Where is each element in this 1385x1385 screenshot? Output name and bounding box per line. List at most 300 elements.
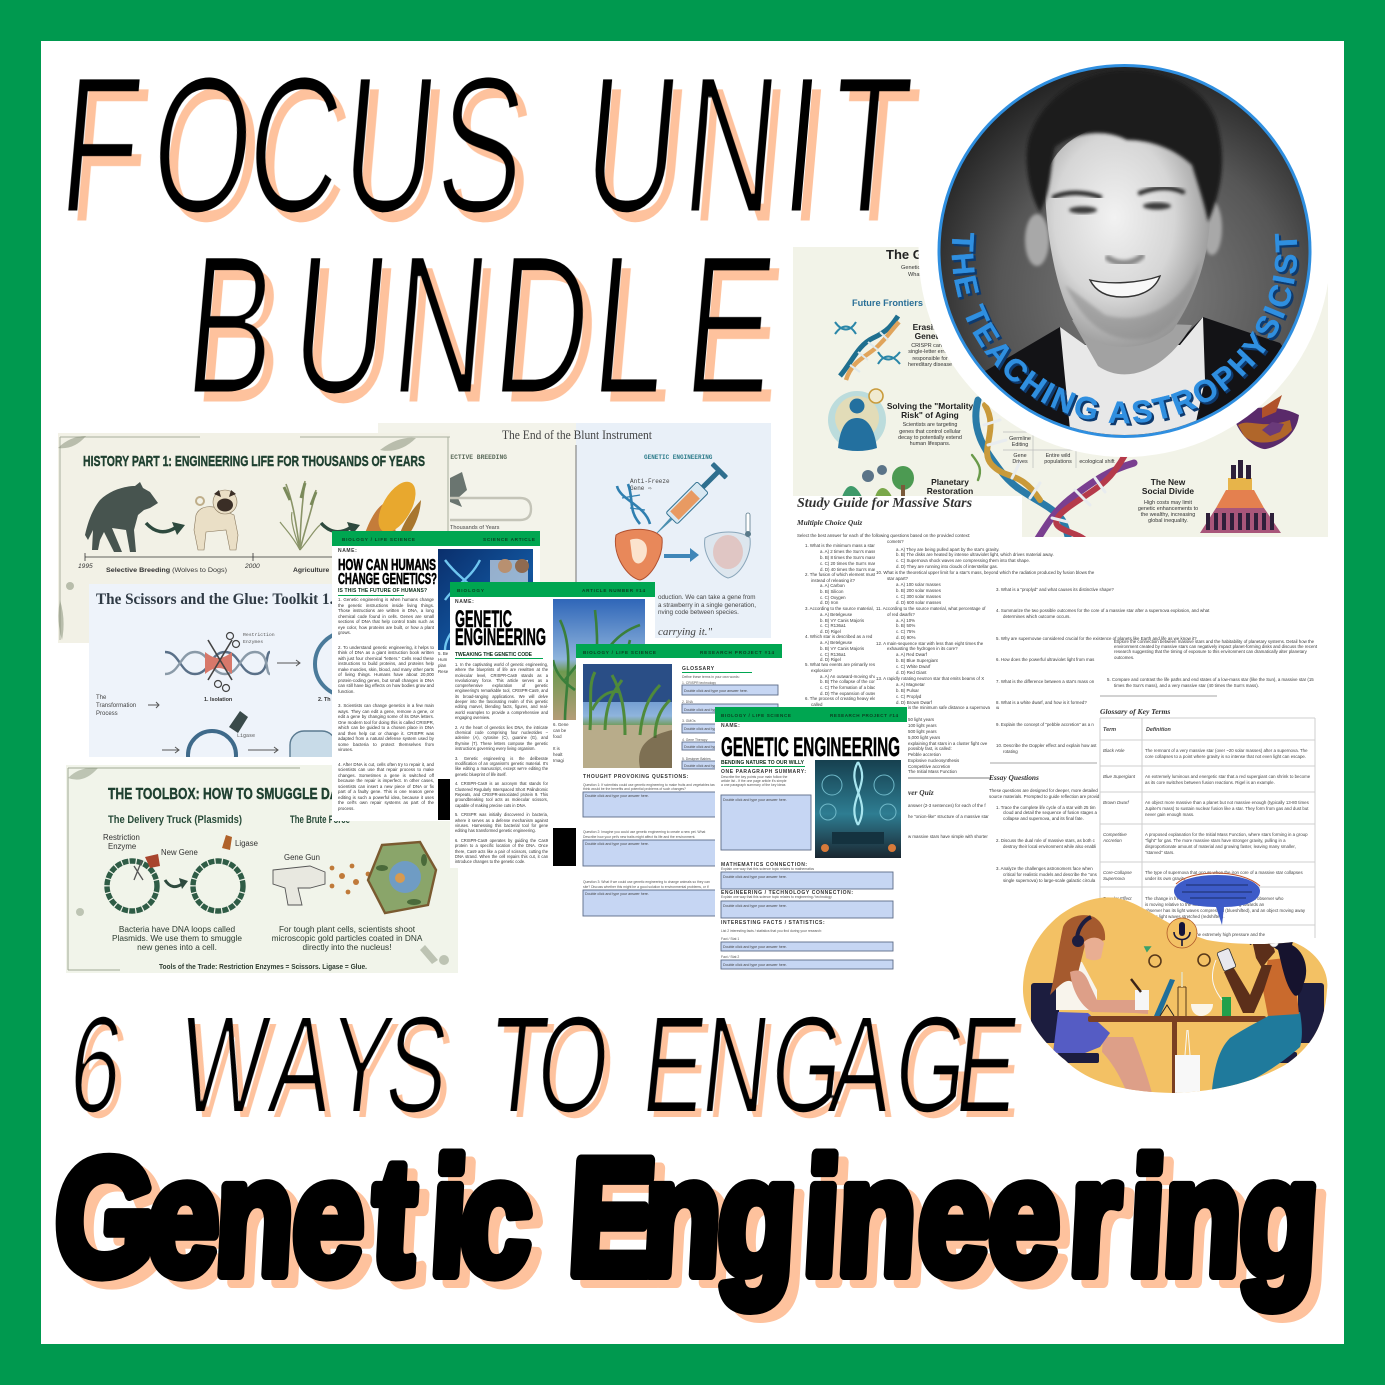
slide body text: nving code between species. — [658, 609, 739, 616]
text: planetary restoration — [927, 479, 973, 494]
header bar: RESEARCH PROJECT #14 — [830, 713, 898, 718]
connection sections: Fact / Stat 2 — [721, 955, 739, 959]
slide title: The End of the Blunt Instrument — [502, 428, 652, 442]
title: Genetic Engineering: Genetic Engineering — [50, 1126, 1323, 1310]
connection sections: MATHEMATICS CONNECTION: — [721, 862, 808, 868]
smile — [1090, 276, 1160, 297]
name field: NAME: — [338, 548, 357, 554]
article text: 2. At the heart of genetics lies DNA, the intricate chemical code comprising four nucleotides – adenine (A), cytosine (C), guanine (G), and thymine (T). These letters compose the genetic instructions governing every living organism. — [455, 725, 548, 751]
icon: planetary trees — [842, 465, 914, 497]
quiz column one — [805, 543, 879, 707]
article side text and box: 5. Be — [438, 651, 449, 656]
left woman legs — [1102, 1037, 1152, 1093]
summary block: a one paragraph summary of the key ideas — [721, 783, 786, 787]
header bar: BIOLOGY / LIFE SCIENCE — [342, 537, 415, 542]
quiz column two: b. B) The disks are heated by intense ultraviolet light, which drives material away. — [896, 552, 1054, 557]
short answers column: 9. Explain the concept of "pebble accretion" as a n — [996, 722, 1094, 727]
icon: microphone badge — [1167, 918, 1197, 948]
quiz column one: 6. The process of creating heavy ele — [805, 696, 876, 701]
arrow: isolation — [277, 660, 300, 666]
project subtitle: BENDING NATURE TO OUR WILLY — [721, 760, 805, 766]
quiz column two: star apart? — [887, 576, 909, 581]
face — [1045, 124, 1210, 347]
essay continuation: times the Sun's mass), and a very massive star (40 times the Sun's mass). — [1114, 683, 1259, 688]
header bar — [576, 644, 782, 658]
header bar — [715, 707, 907, 722]
title: 6 WAYS TO ENGAGE: 6 WAYS TO ENGAGE — [63, 987, 1026, 1141]
summary block: ONE PARAGRAPH SUMMARY: — [721, 769, 807, 775]
quiz column two: c. C) 300 solar masses — [896, 594, 942, 599]
process label: Transformation — [96, 703, 136, 709]
icon: frozen strawberry — [705, 532, 750, 578]
table: gene editing: Drives — [1012, 459, 1028, 465]
article text: 4. CRISPR-Cas9 is an acronym that stands for Clustered Regularly Interspaced Short Palindromic Repeats, and CRISPR-associated protein 9. This groundbreaking tool acts as molecular scissors, capable of making precise cuts in DNA. — [455, 781, 548, 808]
connection sections: Double click and type your answer here. — [723, 963, 787, 967]
arrow: strawberry transformation — [664, 548, 699, 562]
title: FOCUS UNIT: FOCUS UNIT — [52, 37, 919, 254]
infographic heading: What comes next — [908, 272, 952, 278]
icon: scissors and gene — [134, 854, 160, 880]
icon: ligase ring — [188, 731, 236, 779]
article text: 6. CRISPR-Cas9 operates by guiding the Cas9 protein to a specific location of the DNA. Once there, Cas9 acts like a pair of scissors, cutting the DNA strand. When the cell repairs this cut, it can introduce changes to the genetic code. — [455, 838, 548, 864]
tools of the trade line: Tools of the Trade: Restriction Enzymes = Scissors. Ligase = Glue. — [159, 962, 367, 971]
label: gene gun: Gene Gun — [284, 853, 320, 862]
quiz column two: d. D) Brown Dwarf — [896, 700, 933, 705]
curved name text: THE TEACHING ASTROPHYSICIST — [952, 233, 1298, 424]
quiz column two: b. B) 200 solar masses — [896, 588, 942, 593]
essay continuation: research suggesting that the timing of exposure to this environment can dramatically alter planetary — [1114, 649, 1308, 654]
glossary table: Term — [1103, 727, 1116, 733]
quiz column one: d. D) Rigel — [820, 629, 841, 634]
article text — [338, 597, 434, 819]
name field: NAME: — [455, 599, 474, 605]
glossary table — [1100, 718, 1315, 938]
slide quote: carrying it." — [658, 626, 712, 638]
text: planetary restoration: Planetary — [931, 477, 969, 487]
cover: column one cut edge — [875, 538, 975, 708]
eyes — [1069, 202, 1171, 214]
quiz column two: explaining that stars in a cluster fight ove — [908, 741, 988, 746]
subheadings: The Brute Force — [290, 814, 350, 826]
project title: GENETIC ENGINEERING — [721, 732, 900, 762]
timeline: 1995 — [78, 563, 93, 570]
subheadings — [108, 814, 350, 826]
quiz column one: c. C) The formation of a black — [820, 685, 878, 690]
essay questions: destroy their local environment while also enabli — [1003, 844, 1096, 849]
glossary table: "starved" stars. — [1145, 850, 1174, 855]
panel: research project worksheet — [576, 644, 782, 919]
glossary table: Core-Collapse — [1103, 870, 1132, 875]
glossary table: is moving relative to the source. An object moving towards an — [1145, 902, 1265, 907]
anti-freeze gene label: Gene ⇨ — [630, 485, 652, 492]
quiz column two: w massive stars have simple with shorter — [908, 834, 988, 839]
article text: 3. Scientists can change genetics in a few main ways. They can edit a gene, remove a gene, or edit a gene by changing some of its DNA letters. One modern tool for doing this is called CRISPR, which can be guided to a chosen place in DNA and then help cut or change it. CRISPR was adapted from a natural defense system used by some bacteria to protect themselves from viruses. — [338, 703, 434, 752]
nose shadow — [1108, 256, 1142, 263]
text: mortality risk — [887, 401, 974, 447]
quiz column two: comets? — [887, 539, 904, 544]
table: gene editing: populations — [1044, 459, 1072, 465]
label: new gene: New Gene — [161, 848, 198, 857]
text: erasing genetic: responsible for — [912, 356, 948, 362]
process label: Process — [96, 711, 118, 717]
subheadings: The Delivery Truck (Plasmids) — [108, 814, 242, 826]
icon: wolf — [85, 482, 158, 552]
quiz column two: The Initial Mass Function — [908, 769, 957, 774]
quiz column two: a. A) 10% — [896, 618, 915, 623]
article title — [338, 557, 437, 588]
arrow: wheat to corn — [320, 522, 360, 532]
glossary table: Jupiter's mass) to sustain nuclear fusion like a star. They form from gas and dust but — [1145, 806, 1309, 811]
selective breeding label: SELECTIVE BREEDING — [439, 454, 507, 461]
glossary table: disproportionate amount of material and growing faster, leaving many smaller, — [1145, 844, 1296, 849]
quiz column one: b. B) VY Canis Majoris — [820, 618, 865, 623]
text: new social divide: Social Divide — [1142, 486, 1194, 496]
glossary block: 5. Designer Babies — [682, 757, 711, 761]
cover: column two cut edge — [990, 586, 996, 776]
essay questions: 3. Analyze the challenges astronomers face when — [996, 866, 1093, 871]
summary block: article list - If the one page article it's simple — [721, 779, 787, 783]
header bar: BIOLOGY / LIFE SCIENCE — [721, 713, 791, 718]
article side text and box: Rese — [438, 669, 449, 674]
text: erasing genetic: CRISPR can fix — [911, 343, 949, 349]
timeline: Agriculture — [293, 567, 329, 574]
text: mortality risk: genes that control cellular — [899, 429, 961, 435]
connection sections: Double click and type your answer here. — [723, 875, 787, 879]
timeline loop — [440, 498, 531, 520]
orange blob — [1023, 897, 1327, 1093]
label: restriction enzyme: Enzyme — [108, 842, 136, 851]
quiz column one: c. C) 20 times the Sun's mass — [820, 561, 879, 566]
label: ligase: Ligase — [235, 839, 258, 848]
ears — [1025, 201, 1222, 266]
icon: plasmid ring — [315, 632, 379, 696]
header bar: ARTICLE NUMBER #14 — [582, 588, 645, 593]
panel: scissors and glue slide — [89, 584, 332, 757]
quiz column two: answer (2-3 sentences) for each of the f — [908, 803, 986, 808]
article title — [455, 606, 546, 651]
quiz column two: he "onion-like" structure of a massive star — [908, 814, 989, 819]
text: plasmid caption: Plasmids. We use them to smuggle — [112, 933, 242, 943]
header bar: RESEARCH PROJECT #14 — [700, 650, 774, 655]
glossary table: observer has its light waves compressed (blueshifted), and an object moving away — [1145, 908, 1306, 913]
quiz column one: 1. What is the minimum mass a star — [805, 543, 875, 548]
text: mortality risk: Solving the "Mortality — [887, 401, 974, 411]
quiz column one: explosion? — [811, 668, 833, 673]
article title: ENGINEERING — [455, 624, 546, 651]
thought provoking questions — [583, 774, 728, 916]
essay questions: collapse and supernova, and its final fate. — [1003, 816, 1084, 821]
article side text and box: can be — [553, 728, 567, 733]
glossary block: 4. Gene Therapy — [682, 738, 708, 742]
quiz column one: c. C) R136a1 — [820, 623, 846, 628]
process label: The — [96, 695, 107, 701]
article side text and box: food — [553, 734, 562, 739]
article side text and box — [438, 651, 450, 820]
icon: gold particles — [330, 864, 370, 894]
cheek shading — [1065, 260, 1200, 339]
glossary block — [682, 666, 778, 769]
multiple choice heading: Multiple Choice Quiz — [796, 518, 862, 527]
slide title: HISTORY PART 1: ENGINEERING LIFE FOR THOUSANDS OF YEARS — [83, 453, 425, 470]
article text — [455, 662, 548, 867]
left woman face — [1084, 938, 1104, 960]
essay questions: source materials. Prompted to guide reflection are provid — [989, 794, 1100, 799]
table: gene editing: Germline — [1009, 436, 1031, 442]
short answers column: 7. What is the difference between a star's mass on — [996, 679, 1095, 684]
glossary table: Competitive — [1103, 832, 1127, 837]
timeline: 2000 — [244, 563, 260, 570]
text: erasing genetic: single-letter errors — [908, 349, 952, 355]
quiz column one: c. C) Oxygen — [820, 595, 846, 600]
text: erasing genetic: Genetic — [915, 331, 946, 341]
arrow: to ligase — [162, 747, 179, 753]
glossary table: as its core switches between fusion reactions. Rigel is an example. — [1145, 780, 1275, 785]
quiz column two: Explosive nucleosynthesis — [908, 758, 960, 763]
connection sections: Fact / Stat 1 — [721, 937, 739, 941]
title: 6 WAYS TO ENGAGE: 6 WAYS TO ENGAGE — [69, 993, 1032, 1147]
short answers column: 5. Why are supernovae considered crucial for the existence of planets like Earth and life as we know it? — [996, 636, 1197, 641]
timeline — [78, 553, 340, 574]
left woman headphones — [1072, 917, 1091, 947]
vase bowl and can — [1178, 972, 1231, 1016]
essay questions: cloud and detail the sequence of fusion stages a — [1003, 810, 1098, 815]
icons: reactions — [1145, 947, 1210, 967]
short answers column: determines which outcome occurs. — [1003, 614, 1071, 619]
glossary table: Definition — [1146, 727, 1172, 733]
essay continuation: environment created by massive stars can negatively impact planet-forming disks and discuss the recent — [1114, 644, 1318, 649]
quiz column two: a. A) 100 solar masses — [896, 582, 941, 587]
panel: study guide — [793, 496, 1318, 938]
text: gene gun caption: directly into the nucleus! — [302, 942, 392, 952]
arrow: plasmid — [165, 878, 188, 889]
label: restriction enzyme: Restriction — [103, 833, 140, 842]
quiz column one: called — [811, 702, 823, 707]
short answers column: 10. Describe the Doppler effect and explain how ast — [996, 743, 1097, 748]
quiz column two: 500 light years — [908, 729, 937, 734]
summary block: Describe the key points your main follow the — [721, 775, 787, 779]
article text: 1. In the captivating world of genetic engineering, where the blueprints of life are rewritten at the molecular level, CRISPR-Cas9 stands as a revolutionary force. This article serves as a comprehensive exploration of genetic engineering's remarkable tool, CRISPR-Cas9, and its broad-ranging applications. We will delve deeper into the fascinating realm of this genetic editing marvel, blending facts, figures, and real-world examples to provide a comprehensive and engaging overview. — [455, 662, 548, 720]
eyebrows — [1054, 188, 1183, 197]
quiz column two: 13. A rapidly rotating neutron star that emits beams of X — [876, 676, 984, 681]
restriction enzymes label — [243, 632, 275, 645]
header bar — [450, 582, 655, 597]
icon: thermometer — [745, 513, 751, 537]
glossary table: Accretion — [1102, 838, 1122, 843]
glossary block: 2. DNA — [682, 700, 694, 704]
table: gene editing: Editing — [1012, 442, 1028, 448]
text: gene gun caption: microscopic gold particles coated in DNA — [272, 933, 423, 943]
right woman face and arm — [1252, 938, 1275, 968]
text: new social divide: High costs may limit — [1144, 500, 1192, 506]
icon: wolf head — [450, 472, 467, 507]
glossary block: Double click and type your answer here. — [684, 764, 748, 768]
badge: the teaching astrophysicist portrait — [918, 64, 1328, 457]
essay questions: 2. Discuss the dual role of massive stars, as both c — [996, 838, 1096, 843]
quiz column one: b. B) 8 times the Sun's mass — [820, 555, 877, 560]
article subtitle: IS THIS THE FUTURE OF HUMANS? — [338, 588, 428, 594]
header bar: SCIENCE ARTICLE — [483, 537, 535, 542]
thought provoking questions: Question 3: What if we could use genetic engineering to change animals so they can — [583, 880, 710, 884]
text: mortality risk: decay to potentially extend — [898, 435, 962, 441]
anti-freeze gene label — [630, 478, 670, 490]
essay questions: These questions are designed for deeper, more detailed — [989, 788, 1098, 793]
shirt — [1060, 317, 1205, 450]
genetic engineering label: GENETIC ENGINEERING — [644, 454, 713, 461]
phone and earphone cord — [1212, 917, 1279, 1000]
quiz column two: d. D) Red Giant — [896, 670, 927, 675]
header bar — [332, 531, 540, 546]
table: gene editing: Entire wild — [1046, 453, 1070, 459]
thought provoking questions: site? Discuss whether this might be a good solution to environmental problems, or if — [583, 885, 709, 889]
article text: 4. After DNA is cut, cells often try to repair it, and scientists can use that repair process to make changes. Sometimes a gene is switched off because the repair is imperfect. In other cases, scientists can insert a new piece of DNA or fix part of a faulty gene. This is one reason gene editing is such a powerful idea, because it uses the cell's own repair systems as part of the process. — [338, 762, 434, 810]
text: new social divide: The New — [1151, 477, 1186, 487]
quiz column one: b. B) The collapse of the core — [820, 679, 878, 684]
article image: DNA lab — [438, 549, 533, 650]
glossary table: The massive stars where the extremely high pressure and the — [1145, 932, 1266, 937]
title: BUNDLE: BUNDLE — [178, 214, 784, 435]
header bar: BIOLOGY — [457, 588, 484, 593]
quiz column one: a. A) Betelgeuse — [820, 612, 853, 617]
study guide heading: Study Guide for Massive Stars — [797, 496, 973, 511]
glossary table: An extremely luminous and energetic star that a red supergiant can shrink to become — [1145, 774, 1311, 779]
article side text and box: It is — [553, 746, 561, 751]
timeline caption: Thousands of Years — [450, 525, 500, 531]
table — [1088, 1016, 1266, 1093]
thought provoking questions: Double click and type your answer here. — [585, 794, 649, 798]
name field: NAME: — [721, 723, 740, 729]
short answers column: rotating — [1003, 749, 1018, 754]
shopping bag — [1175, 1030, 1200, 1093]
table: gene editing: ecological shift — [1079, 459, 1115, 465]
text: erasing genetic: hereditary disease — [908, 362, 952, 368]
quiz column two: ver Quiz — [908, 788, 934, 797]
text: gene gun caption — [272, 924, 423, 952]
quiz column one: a. A) An outward-moving sho — [820, 674, 877, 679]
glossary block: 3. GMOs — [682, 719, 696, 723]
glossary table: An object more massive than a planet but not massive enough (typically 13-80 times — [1145, 800, 1310, 805]
text: plasmid caption — [112, 924, 242, 952]
connection sections — [721, 862, 893, 969]
portrait photo — [930, 60, 1320, 450]
suit — [930, 317, 1320, 450]
infographic heading — [886, 250, 920, 276]
quiz column one: 5. What two events are primarily res — [805, 662, 876, 667]
panel: toolbox slide — [66, 765, 458, 973]
glossary block: Double click and type your answer here. — [684, 689, 748, 693]
text: new social divide: the wealthy, increasing — [1141, 512, 1195, 518]
quiz column two: a. A) Red Dwarf — [896, 652, 928, 657]
article text: 5. CRISPR was initially discovered in bacteria, where it serves as a defense mechanism against viruses. Harnessing this bacterial tool for gene editing has transformed genetic engineering. — [455, 812, 548, 833]
icon: corn — [366, 482, 421, 531]
glossary table: The remnant of a very massive star (over ~20 solar masses) after a supernova. The — [1145, 748, 1308, 753]
quiz column two: 100 light years — [908, 723, 937, 728]
quiz column two: a. A) They are being pulled apart by the star's gravity. — [896, 547, 999, 552]
label: restriction enzyme — [103, 833, 140, 851]
icon: social pyramid — [1200, 460, 1281, 533]
anti-freeze gene label: Anti-Freeze — [630, 478, 670, 485]
process label — [96, 695, 136, 717]
glossary table: Black Hole — [1103, 748, 1125, 753]
quiz column two: c. C) 75% — [896, 629, 915, 634]
glossary block: Double click and type your answer here. — [684, 727, 748, 731]
quiz column one: instead of releasing it? — [811, 578, 855, 583]
short answers column: 3. What is a "proplyd" and what causes its distinctive shape? — [996, 587, 1114, 592]
chairs and figures — [1031, 914, 1324, 1093]
icon: ligase bottle — [222, 835, 232, 850]
timeline: Selective Breeding (Wolves to Dogs) — [106, 567, 227, 574]
article image: corn field — [553, 599, 645, 720]
thought provoking questions: think would be the benefits and potential problems of such changes? — [583, 787, 686, 791]
table: gene editing: Gene — [1013, 453, 1027, 459]
quiz column two: Competitive accretion — [908, 764, 951, 769]
speech bubble — [1174, 873, 1260, 925]
icon: wheat grass — [280, 481, 320, 550]
quiz column one: b. B) VY Canis Majoris — [820, 646, 865, 651]
quiz column two: d. D) 90% — [896, 635, 916, 640]
quiz column two: a. A) Magnetar — [896, 682, 925, 687]
text: new social divide: genetic enhancements to — [1138, 506, 1198, 512]
text: mortality risk: Scientists are targeting — [903, 422, 957, 428]
article side text and box: plan — [438, 663, 447, 668]
icon: DNA strands — [835, 316, 900, 380]
slide body text: oduction. We can take a gene from — [658, 594, 756, 601]
icon: beetle and deer — [1233, 395, 1299, 449]
cup and tablet — [1131, 979, 1175, 1016]
quiz column two: exhausting the hydrogen in its core? — [887, 646, 958, 651]
right woman jeans — [1212, 1012, 1302, 1090]
icon: cut strawberry — [615, 529, 662, 580]
quiz column two: of red dwarfs? — [887, 612, 915, 617]
quiz column one: 4. Which star is described as a red — [805, 634, 873, 639]
article subtitle: TWEAKING THE GENETIC CODE — [455, 652, 533, 658]
connection sections: Double click and type your answer here. — [723, 904, 787, 908]
thought provoking questions: Double click and type your answer here. — [585, 842, 649, 846]
glossary table: Doppler Effect — [1103, 896, 1132, 901]
glossary table: A proposed explanation for the Initial Mass Function, where stars forming in a group — [1145, 832, 1308, 837]
short answers column: 8. What is a white dwarf, and how is it formed? — [996, 700, 1087, 705]
article text: 1. Genetic engineering is when humans change the genetic instructions inside living things. Those instructions are written in DNA, a long chemical code found in cells. Genes are small sections of DNA that help control traits such as eye color, how proteins are built, or how a plant grows. — [338, 597, 434, 635]
quiz column two: 5,000 light years — [908, 735, 941, 740]
quiz column two: d. D) They are running into clouds of interstellar gas. — [896, 564, 998, 569]
glossary table: Supernova — [1103, 876, 1125, 881]
table: gene editing — [1003, 430, 1115, 468]
connection sections: Explain one way that this science topic relates to mathematics — [721, 867, 814, 871]
summary block: Double click and type your answer here. — [723, 798, 787, 802]
panel: science article worksheet — [332, 531, 540, 821]
article side text and box: 6. Gene — [553, 722, 569, 727]
thought provoking questions: Question 2: Imagine you could use genetic engineering to create a new pet. What — [583, 830, 705, 834]
glossary block: Double click and type your answer here. — [684, 745, 748, 749]
icon: blue DNA — [617, 484, 650, 524]
article text: 2. To understand genetic engineering, it helps to think of DNA as a giant instruction book written with just four chemical "letters." Cells read these instructions to build proteins, and proteins help make muscles, skin, blood, and many other parts of living things. Humans have about 20,000 protein-coding genes, but small changes in DNA can still have big effects on how bodies grow and function. — [338, 644, 434, 694]
chart: central DNA helix — [972, 400, 1134, 545]
quiz column two: Pebble accretion — [908, 752, 941, 757]
article title: HOW CAN HUMANS — [338, 557, 436, 574]
icon: person circle — [828, 389, 886, 451]
quiz column two: c. C) White Dwarf — [896, 664, 931, 669]
glossary table: Brown Dwarf — [1103, 800, 1130, 805]
quiz column one: 2. The fusion of which element must — [805, 572, 876, 577]
text: mortality risk: Risk" of Aging — [901, 410, 959, 420]
article side text and box: healt — [553, 752, 563, 757]
thought provoking questions: THOUGHT PROVOKING QUESTIONS: — [583, 774, 689, 780]
connection sections: List 2 interesting facts / statistics that you find during your research: — [721, 929, 822, 933]
panel: history slide — [58, 433, 450, 643]
icon: gene gun — [273, 866, 325, 905]
short answers column: 6. How does the powerful ultraviolet light from mas — [996, 657, 1095, 662]
quiz column two: 11. According to the source material, what percentage of — [876, 606, 986, 611]
glossary table: core collapses to a point where gravity is so intense that not even light can escape. — [1145, 754, 1306, 759]
